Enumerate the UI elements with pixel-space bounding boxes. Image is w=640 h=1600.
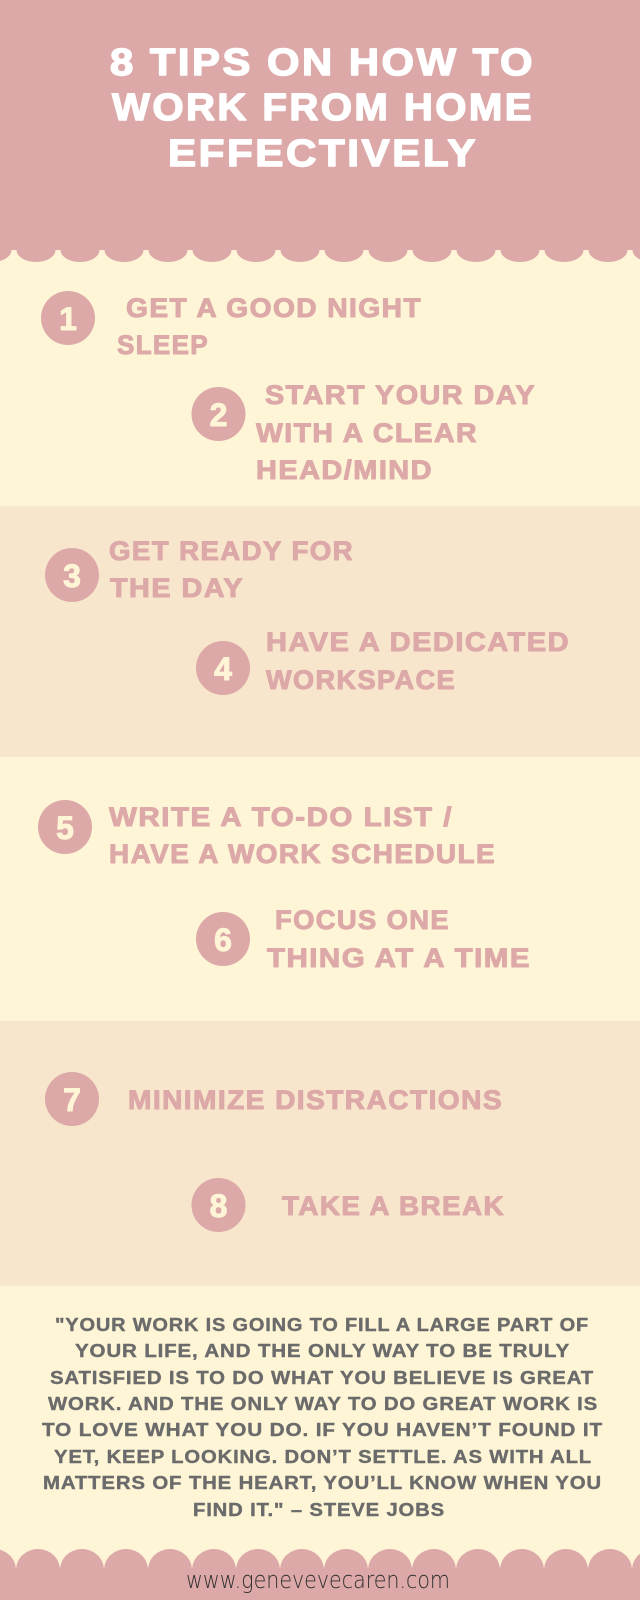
quote text: WORK. AND THE ONLY WAY TO DO GREAT WORK IS [48, 1393, 598, 1414]
title [110, 42, 535, 175]
tip 8 [192, 1178, 505, 1232]
tip 8: TAKE A BREAK [282, 1191, 505, 1221]
tip 8: 8 [210, 1188, 227, 1224]
panel: tips 1 and 2 [0, 250, 640, 506]
quote text: "YOUR WORK IS GOING TO FILL A LARGE PART OF [55, 1314, 589, 1335]
tip 2: 2 [210, 397, 227, 433]
tip 1: GET A GOOD NIGHT [126, 293, 422, 323]
tip 6: 6 [214, 922, 232, 958]
panel: tips 3 and 4 [0, 506, 640, 757]
quote text [42, 1314, 603, 1520]
quote text: FIND IT." – STEVE JOBS [193, 1499, 445, 1520]
tip 4: HAVE A DEDICATED [266, 627, 570, 657]
tip 3 [45, 536, 354, 603]
tip 7: 7 [63, 1082, 81, 1118]
tip 6 [196, 905, 531, 973]
tip 5 [38, 800, 496, 869]
quote text: YOUR LIFE, AND THE ONLY WAY TO BE TRULY [75, 1340, 570, 1361]
tip 2: WITH A CLEAR [256, 418, 478, 448]
tip 6: THING AT A TIME [267, 943, 531, 973]
tip 7: MINIMIZE DISTRACTIONS [128, 1085, 503, 1115]
quote text: YET, KEEP LOOKING. DON’T SETTLE. AS WITH ALL [54, 1446, 592, 1467]
tip 4: 4 [214, 651, 232, 687]
tip 3: THE DAY [110, 573, 244, 603]
title: 8 TIPS ON HOW TO [110, 42, 535, 84]
website url: www.genevevecaren.com [186, 1566, 450, 1594]
tip 5: HAVE A WORK SCHEDULE [109, 839, 496, 869]
tip 4 [196, 627, 570, 695]
quote text: MATTERS OF THE HEART, YOU’LL KNOW WHEN YOU [43, 1472, 602, 1493]
tip 2: START YOUR DAY [265, 380, 536, 410]
tip 3: 3 [63, 558, 81, 594]
tip 5: WRITE A TO-DO LIST / [109, 802, 453, 832]
tip 2 [192, 380, 536, 485]
quote text: SATISFIED IS TO DO WHAT YOU BELIEVE IS GREAT [50, 1367, 594, 1388]
title: WORK FROM HOME [112, 87, 534, 129]
tip 7 [45, 1072, 503, 1126]
scalloped edge: footer [0, 1549, 640, 1591]
panel: tips 5 and 6 [0, 757, 640, 1021]
tip 1: SLEEP [117, 330, 209, 360]
tip 2: HEAD/MIND [256, 455, 433, 485]
tip 4: WORKSPACE [266, 665, 456, 695]
panel: tips 7 and 8 [0, 1021, 640, 1286]
quote text: TO LOVE WHAT YOU DO. IF YOU HAVEN’T FOUND IT [42, 1419, 603, 1440]
tip 1: 1 [59, 301, 77, 337]
footer band [0, 1549, 640, 1600]
tip 5: 5 [56, 810, 74, 846]
panel: quote [0, 1286, 640, 1550]
tip 6: FOCUS ONE [275, 905, 450, 935]
tip 1 [41, 291, 422, 360]
tip 3: GET READY FOR [109, 536, 354, 566]
scalloped edge: header [0, 238, 640, 262]
header banner [0, 0, 640, 262]
title: EFFECTIVELY [168, 133, 478, 175]
